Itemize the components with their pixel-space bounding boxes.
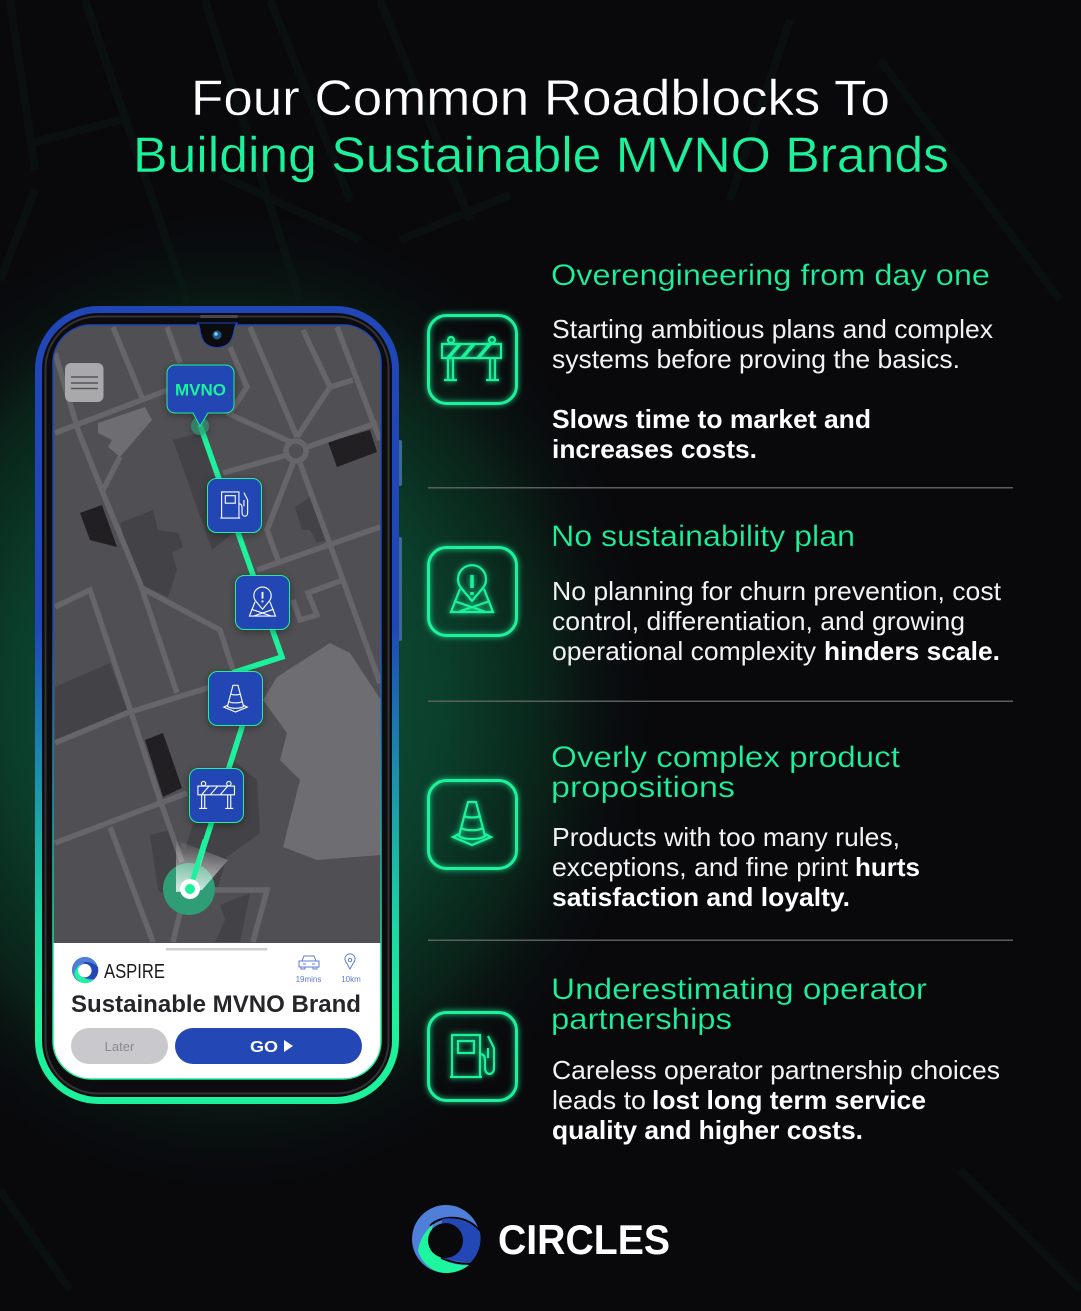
icon: barrier in neon box [428,316,516,404]
marker: MVNO pin [167,365,234,435]
body text: lost long term service [652,1085,926,1115]
body text: satisfaction and loyalty. [552,882,850,912]
Aspire logo: ASPIRE [104,961,165,983]
Circles logo [412,1205,670,1273]
body text [552,576,1002,666]
notch with camera [197,315,238,348]
later button: Later [105,1039,135,1054]
body text: control, differentiation, and growing [552,606,965,636]
body text: Careless operator partnership choices [552,1055,1000,1085]
body text: No planning for churn prevention, cost [552,576,1002,606]
go button [175,1028,362,1064]
icon: warning map in neon box [428,548,516,636]
phone gradient rim [38,310,396,1100]
heading: Overengineering from day one [551,259,990,292]
brand name: Sustainable MVNO Brand [71,991,361,1018]
body text: increases costs. [552,434,757,464]
marker: warning map [236,576,290,630]
map screen [53,325,381,1083]
go button: GO [250,1039,278,1056]
heading [551,741,901,804]
body text: Starting ambitious plans and complex [552,314,993,344]
body text [552,822,920,912]
marker: traffic cone [208,672,262,726]
phone side buttons [398,440,402,641]
body text: leads to [552,1085,646,1115]
icon: fuel pump in neon box [428,1012,516,1100]
marker: road barrier [190,768,244,822]
body text: operational complexity [552,636,816,666]
route line [190,425,282,890]
screen outline [53,325,381,1079]
marker: fuel pump [208,478,262,532]
title [133,70,949,183]
body text: quality and higher costs. [552,1115,863,1145]
body text: exceptions, and fine print [552,852,849,882]
body text: Slows time to market and [552,404,871,434]
heading: partnerships [551,1003,732,1036]
heading: Overly complex product [551,741,901,774]
menu button [65,363,104,402]
bottom card [53,943,381,1083]
body text [552,314,993,464]
phone mockup [38,310,402,1100]
later button [71,1028,168,1064]
title: Four Common Roadblocks To [191,70,890,126]
logo wordmark: CIRCLES [498,1216,670,1263]
body text: hurts [855,852,920,882]
body text: Products with too many rules, [552,822,900,852]
icon: car with travel time: 19mins [296,975,321,984]
heading: No sustainability plan [551,520,855,553]
icon: pin with distance [341,954,361,984]
heading [551,973,927,1036]
heading: Underestimating operator [551,973,927,1006]
roadblock 3: overly complex product propositions [428,741,920,912]
icon: car with travel time [296,956,321,984]
start location marker [163,840,228,915]
logo mark [412,1205,481,1273]
body text [552,1055,1000,1145]
icon: pin with distance: 10km [341,975,361,984]
phone bezel [46,316,388,1094]
heading: propositions [551,771,735,804]
body text: hinders scale. [824,636,1000,666]
roadblock 1: overengineering [428,259,993,464]
Aspire logo [72,957,165,983]
roadblock 4: underestimating operator partnerships [428,973,1000,1145]
body text: systems before proving the basics. [552,344,960,374]
marker: MVNO pin: MVNO [175,380,226,400]
icon: cone in neon box [428,780,516,868]
roadblock 2: no sustainability plan [428,520,1002,666]
title: Building Sustainable MVNO Brands [133,127,949,183]
